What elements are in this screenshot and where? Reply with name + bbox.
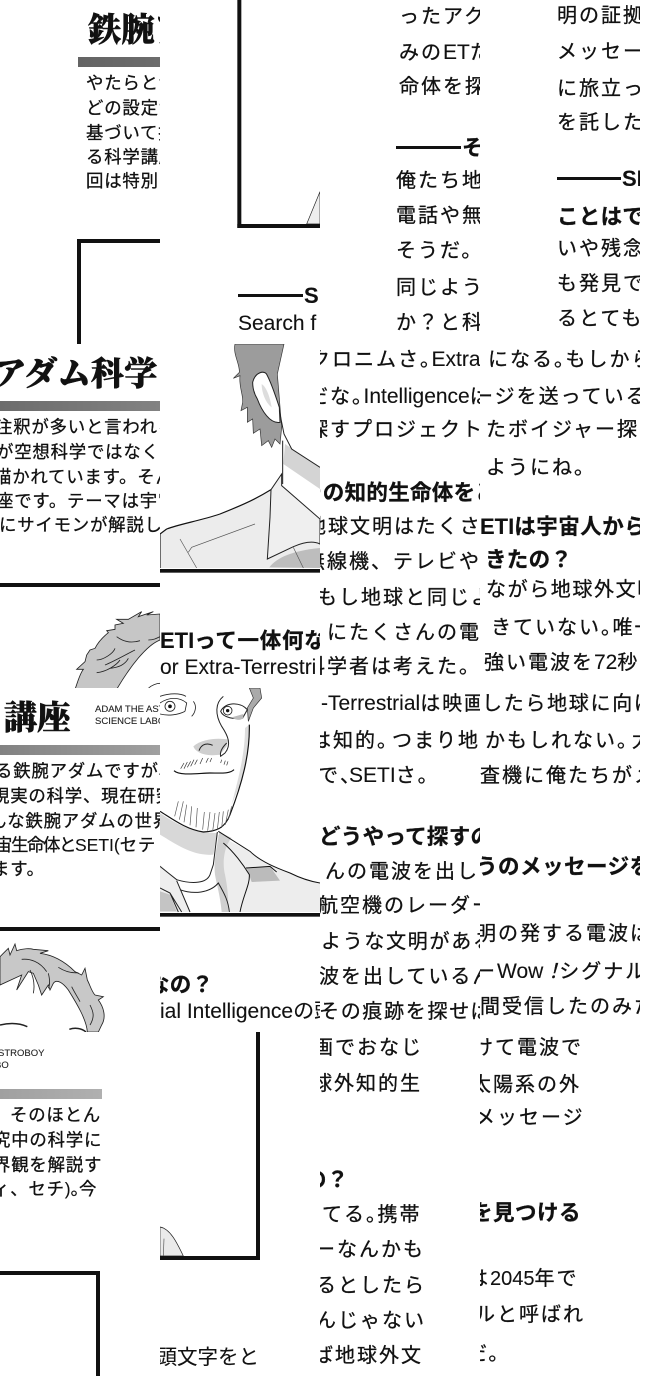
panel: tile column 3 row 1 [480,344,640,688]
illustration frame corner [160,1032,260,1260]
panel: tile column 0 row 0 [0,0,160,344]
illustration frame top [0,927,160,931]
heading bar [0,1089,102,1099]
illustration: hair and brows [0,942,105,1032]
illustration frame corner [237,0,320,228]
dialogue line: てる。携帯 [322,1204,422,1226]
panel: tile column 0 row 2 [0,688,160,1032]
dialogue line: たボイジャー探 [486,419,639,441]
panel: tile column 1 row 3 [160,1032,320,1376]
section heading fragment: きたの？ [485,548,572,572]
dialogue line: んの電波を出し [325,861,479,883]
illustration: man's hair, ear and shoulder [160,344,320,573]
panel: tile column 2 row 2 [320,688,480,1032]
section heading fragment: S [304,283,319,308]
subtitle fragment: Search f [238,312,316,335]
section dash [557,177,621,180]
panel: tile column 0 row 1 [0,344,160,688]
panel: tile column 2 row 0 [320,0,480,344]
section dash [238,294,303,297]
illustration frame top [0,583,160,587]
dialogue line: にたくさんの電 [327,622,480,644]
illustration: man's face and collar [160,688,320,917]
dialogue line: ようにね。 [486,457,596,479]
heading bar [0,401,160,411]
subtitle fragment: or Extra-Terrestri [160,656,316,679]
panel: tile column 3 row 2 [480,688,640,1032]
panel: tile column 1 row 0 [160,0,320,344]
dialogue line: で、SETIさ。 [320,764,440,787]
illustration: hair [75,611,160,688]
panel: tile column 3 row 0 [480,0,640,344]
panel: tile column 1 row 1 [160,344,320,688]
panel: tile column 2 row 3 [320,1032,480,1376]
illustration frame corner [0,1271,100,1376]
illustration frame corner [77,239,160,344]
heading bar [78,57,160,67]
panel: tile column 2 row 1 [320,344,480,688]
intro text line: そのほとん [10,1105,101,1125]
panel: tile column 3 row 3 [480,1032,640,1376]
heading bar [0,745,160,755]
section dash [396,146,461,149]
panel: tile column 0 row 3 [0,1032,160,1376]
panel: tile column 1 row 2 [160,688,320,1032]
title fragment: 講座 [4,701,71,737]
